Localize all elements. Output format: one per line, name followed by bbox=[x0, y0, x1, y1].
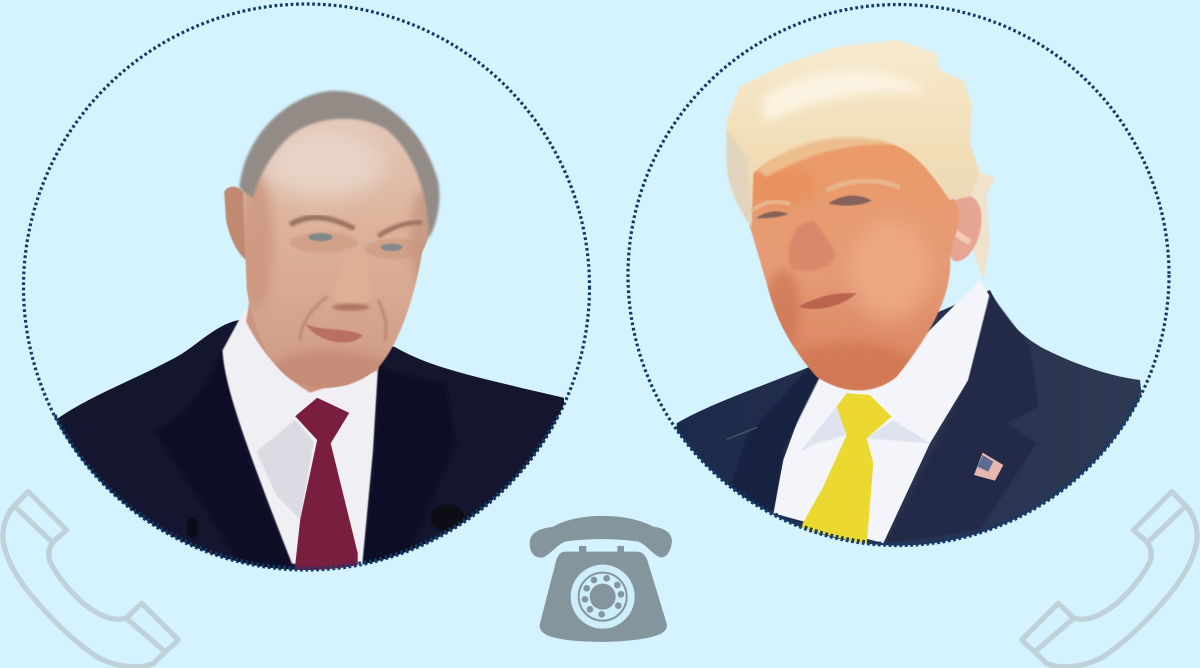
nose bbox=[789, 220, 835, 271]
white shirt bbox=[773, 280, 990, 543]
face shading bbox=[239, 131, 441, 398]
right lapel bbox=[906, 294, 1038, 540]
face bbox=[242, 118, 430, 388]
collar shadow bbox=[800, 407, 930, 452]
ear bbox=[224, 186, 246, 260]
dotted arc over left portrait base bbox=[55, 415, 558, 568]
mouth bbox=[305, 324, 363, 343]
panel: left dotted circle bbox=[24, 4, 590, 570]
portrait: left man in dark suit and burgundy tie bbox=[54, 91, 571, 580]
eyes bbox=[828, 195, 872, 206]
collar shadow bbox=[256, 420, 314, 519]
hair highlight bbox=[763, 70, 930, 123]
eyebrows bbox=[827, 181, 900, 191]
white shirt bbox=[223, 310, 378, 577]
hair bbox=[727, 40, 980, 227]
face shading bbox=[743, 167, 930, 390]
eyebrows bbox=[290, 218, 354, 229]
dotted arc over right portrait base bbox=[678, 395, 1140, 544]
lapel shading bbox=[155, 350, 456, 577]
nose bbox=[336, 292, 370, 302]
portrait: right man in navy suit and yellow tie bbox=[677, 40, 1160, 553]
suit jacket bbox=[677, 290, 1160, 553]
left lapel shadow bbox=[730, 367, 820, 513]
neck bbox=[246, 300, 380, 394]
podium microphone bbox=[430, 504, 464, 531]
suit jacket bbox=[54, 320, 571, 580]
face bbox=[747, 130, 960, 390]
hair back wisps bbox=[970, 173, 995, 280]
smile folds bbox=[300, 296, 386, 340]
pocket seam bbox=[727, 427, 757, 439]
yellow tie bbox=[800, 393, 892, 545]
panel: right dotted circle bbox=[628, 4, 1169, 546]
lapel microphone bbox=[187, 518, 198, 538]
burgundy tie bbox=[294, 398, 358, 580]
eyes bbox=[308, 233, 333, 241]
icon: rotary telephone bbox=[530, 516, 672, 642]
mouth bbox=[798, 293, 857, 309]
icon: right phone handset outline bbox=[1022, 492, 1197, 667]
icon: left phone handset outline bbox=[3, 492, 178, 667]
flag lapel pin bbox=[974, 453, 1003, 481]
ear bbox=[947, 196, 982, 262]
hair bbox=[239, 91, 439, 239]
